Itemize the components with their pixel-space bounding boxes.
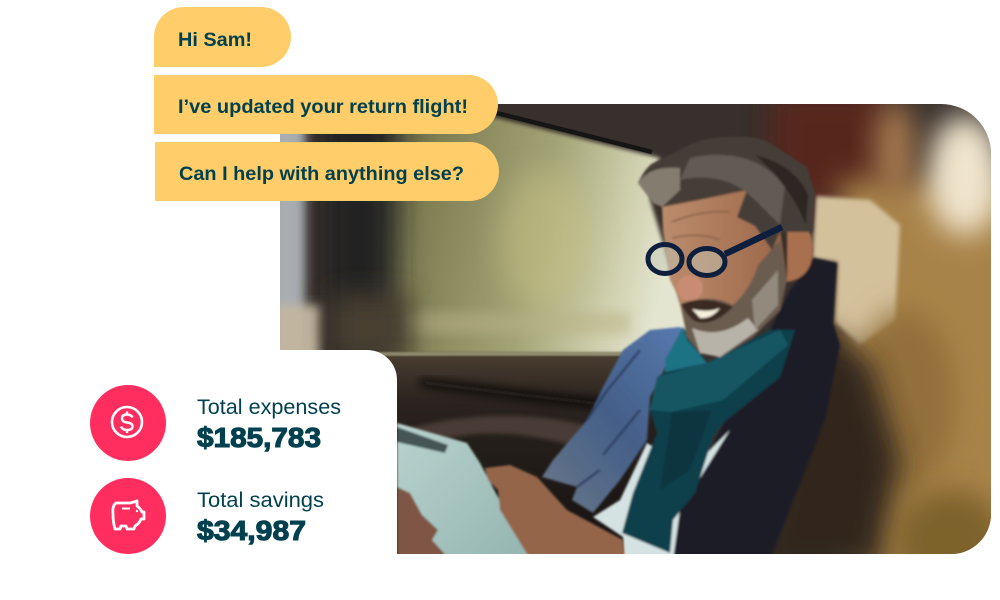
white stats card xyxy=(0,350,397,600)
mouth xyxy=(692,308,720,318)
savings label: Total savings xyxy=(197,489,324,512)
head xyxy=(638,137,815,357)
chat bubble: greeting: Hi Sam! xyxy=(178,29,252,51)
beard xyxy=(681,240,787,357)
teal scarf xyxy=(622,327,795,553)
blurred left pillar xyxy=(280,134,428,353)
chat bubble: offer of help xyxy=(155,142,499,201)
chat bubble: flight update: I’ve updated your return flight! xyxy=(178,96,468,118)
dark blurred coat edge xyxy=(760,330,900,570)
icon: dollar coin xyxy=(90,385,166,461)
dark coat xyxy=(660,258,840,560)
chat bubble: offer of help: Can I help with anything else? xyxy=(179,163,464,185)
blazer folds xyxy=(577,350,640,487)
door panel xyxy=(376,352,682,554)
moustache xyxy=(681,300,733,323)
hair xyxy=(638,137,815,250)
face xyxy=(662,190,787,357)
car interior background xyxy=(298,104,991,554)
photo: man using a tablet in a car xyxy=(280,104,991,554)
nose xyxy=(677,275,703,301)
expenses value: $185,783 xyxy=(197,422,321,453)
blue blazer xyxy=(542,327,690,513)
forehead wrinkles xyxy=(672,212,730,240)
seat shoulder warm blur xyxy=(855,310,955,490)
chat bubble: flight update xyxy=(154,75,498,134)
chat bubble: greeting xyxy=(154,7,291,67)
white shirt xyxy=(593,430,730,560)
icon: piggy bank xyxy=(90,478,166,554)
lower right amber blur xyxy=(893,480,991,554)
right hand xyxy=(485,465,625,562)
expenses label: Total expenses xyxy=(197,396,341,419)
left hand fingers xyxy=(397,486,446,554)
glasses xyxy=(648,227,782,276)
ear xyxy=(787,228,813,282)
window frame strip xyxy=(497,113,652,152)
window view xyxy=(360,118,690,354)
window highlights xyxy=(400,170,630,334)
tablet xyxy=(397,423,532,562)
cream seat headrest xyxy=(812,196,900,345)
savings value: $34,987 xyxy=(197,515,306,546)
